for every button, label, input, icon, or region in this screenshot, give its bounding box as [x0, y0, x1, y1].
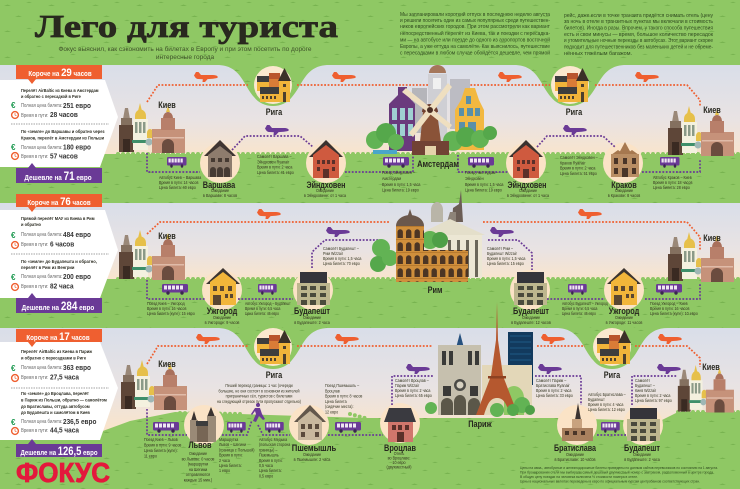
captions band 3: Маршрутка — [219, 437, 238, 442]
captions band 3: на Шегини — [189, 467, 208, 472]
captions band 3: (маршрутки — [188, 461, 209, 467]
icon: hiker at border — [251, 403, 265, 422]
captions band 1: Время в пути: 2 часа — [257, 164, 293, 170]
captions band 3: Ожидание — [189, 451, 207, 456]
intro text: column 1: Европы, а уже оттуда на самолёте. Как выяснилось, путешествие — [400, 44, 550, 50]
city labels: Киев — [702, 361, 720, 372]
overland option: Полная цена билета: — [21, 145, 62, 150]
banner: shorter by 76 hours: Короче на 76 часов — [27, 195, 91, 208]
captions band 2: Автобус Будапешт – Ужгород — [562, 300, 608, 306]
captions band 3: Вроцлав — [325, 388, 340, 393]
captions band 2: Ожидание — [213, 315, 231, 320]
captions band 1: Цена билета: 41 евро — [257, 169, 294, 175]
band 2 landscape: sky and ground — [0, 203, 740, 329]
captions band 3: (двухместный) — [387, 464, 412, 470]
captions band 3: Поезд Пшемышль – — [325, 383, 359, 388]
captions band 2: Самолёт Будапешт – — [323, 246, 359, 251]
direct flight option: Прямой перелёт МАУ из Киева в Рим — [21, 215, 95, 221]
overland option: Полная цена билета: — [21, 419, 62, 424]
captions band 3: 0,5 часа — [259, 463, 273, 468]
Rome landmark — [370, 190, 485, 282]
direct flight option: 251 евро — [63, 103, 92, 110]
captions band 1: Эйндховен — [465, 176, 484, 181]
captions band 3: Ожидание — [633, 452, 651, 457]
captions band 1 — [159, 154, 693, 198]
captions band 3: Пеший переход границы: 1 час (очереди — [225, 383, 293, 388]
captions band 2: Время в пути: 16 часов — [650, 306, 690, 311]
Riga landmarks — [257, 68, 631, 364]
city labels: Рига — [566, 106, 583, 117]
overland option: 180 евро — [63, 144, 92, 152]
captions band 1: в Варшаве: 8 часов — [203, 193, 238, 198]
overland option — [11, 128, 105, 161]
direct flight option: 363 евро — [63, 365, 92, 372]
captions band 2: Время в пути: 1,5 часа — [323, 256, 362, 261]
direct flight option: Время в пути: — [21, 113, 48, 118]
panel: band 3 comparison — [0, 329, 118, 458]
captions band 3: Время в пути: — [259, 457, 283, 463]
captions band 3: Автобус Медыка — [259, 437, 287, 442]
panel: band 2 comparison — [0, 194, 118, 313]
overland option: Полная цена билета: — [21, 274, 62, 279]
title: Лего для туриста — [35, 8, 338, 44]
captions band 2: Ожидание — [522, 315, 540, 320]
captions band 3: приграничных сёл, туристов с билетами — [226, 393, 293, 399]
captions band 2: Автобус Ужгород – Будапешт — [245, 300, 291, 306]
intro text: column 1: ми — на автобусе или поезде до одного из аэропортов восточной — [400, 36, 550, 44]
captions band 2 — [147, 246, 698, 325]
city labels: Эйндховен — [508, 179, 546, 190]
direct flight option: 27,5 часа — [50, 374, 79, 382]
overland option: Время в пути: — [21, 154, 48, 159]
captions band 1: Цена билета: 19 евро — [382, 187, 419, 193]
intro text: column 2: рейс, даже если в точке транзита придётся снимать отель (цену — [564, 12, 713, 19]
captions band 2: в Будапеште: 12 часов — [511, 320, 552, 325]
captions band 1: Автобус Краков – Киев — [653, 175, 692, 180]
captions band 3 — [144, 378, 672, 483]
captions band 1: Ожидание — [316, 188, 334, 193]
overland option: € — [11, 273, 16, 282]
captions band 1: Цена билета: 51 евро — [560, 170, 597, 176]
captions band 3: Будапешт — [588, 397, 605, 402]
intro text: column 1: Мы запланировали короткий отпуск в последнюю неделю августа — [400, 11, 550, 18]
city labels: Париж — [468, 418, 493, 429]
overland option — [11, 391, 107, 435]
city labels: Киев — [703, 232, 721, 243]
overland option: € — [11, 418, 16, 427]
direct flight option: Время в пути: — [21, 242, 48, 247]
captions band 1: Время в пути: 18 часов — [653, 180, 693, 185]
captions band 2: Цена билета: 46 евро — [245, 310, 280, 316]
footnote — [520, 465, 718, 484]
intro text: column 2 — [564, 12, 714, 57]
city labels: Киев — [158, 358, 176, 369]
direct flight option: € — [11, 231, 16, 240]
captions band 3: Ожидание — [303, 452, 321, 457]
intro text: column 1: и решили посетить один из самых популярных среди путешествен- — [400, 18, 550, 24]
captions band 1: Время в пути: 2 часа — [560, 165, 596, 171]
captions band 3: Время в пути: 8 часов — [325, 393, 363, 399]
captions band 3: во Вроцлаве: — [388, 455, 410, 461]
captions band 3: (граница с Польшей) — [219, 447, 255, 453]
intro text: column 2: за ночь в отеле в транзитных пунктах мы включали в стоимость — [564, 19, 713, 25]
captions band 3: Время в пути: — [219, 452, 243, 458]
subtitle: интересные города — [156, 54, 214, 61]
panel: band 1 comparison — [0, 65, 118, 183]
captions band 1: Поезд Эйндховен – — [382, 170, 415, 175]
captions band 3: Самолёт — [635, 378, 650, 383]
captions band 3: Братислава Ryanair — [536, 383, 570, 388]
captions band 3: Цена билета: 12 евро — [588, 407, 625, 412]
captions band 3: отправляются — [186, 472, 210, 477]
captions band 2: Цена билета: 46 евро — [562, 310, 597, 316]
overland option: до Братиславы, оттуда автобусом — [21, 403, 90, 409]
direct flight option: и обратно — [21, 221, 41, 227]
direct flight option: 28 часов — [50, 112, 78, 119]
captions band 2: в Ужгороде: 9 часов — [205, 320, 240, 325]
captions band 1: Ожидание — [211, 188, 229, 193]
captions band 1: Цена билета: 19 евро — [465, 187, 502, 193]
captions band 2: Поезд Ужгород – Киев — [650, 301, 688, 306]
captions band 3: Цена билета: — [219, 463, 242, 468]
captions band 3: Цена билета: 65 евро — [395, 393, 432, 398]
captions band 1: Эйндховен Ryanair — [257, 159, 290, 164]
captions band 1: Время в пути: 1,5 часа — [382, 182, 421, 187]
intro text: column 2: подходит для путешественников без маленьких детей и не обреме- — [564, 44, 713, 50]
captions band 3: (польская сторона — [259, 442, 291, 447]
captions band 3: Ожидание — [566, 452, 584, 457]
overland option: Краков, перелёт в Амстердам из Польши — [21, 135, 104, 141]
captions band 3: Время в пути: 9 часов — [144, 442, 182, 448]
captions band 1: Цена билета: 28 евро — [653, 185, 690, 190]
captions band 3: Отель — [394, 451, 404, 456]
intro text: column 1 — [400, 11, 551, 56]
direct flight option: 6 часов — [50, 241, 75, 249]
overland option: По «земле» до Варшавы и обратно через — [21, 128, 105, 134]
captions band 1: Время в пути: 14 часов — [159, 180, 199, 185]
captions band 1: Самолёт Варшава – — [257, 154, 291, 159]
city labels: Ужгород — [609, 305, 640, 316]
city labels: Будапешт — [294, 305, 330, 316]
captions band 3: Автобус Братислава – — [588, 392, 626, 397]
captions band 3: Цена билета: 33 евро — [536, 393, 573, 398]
band 3 landscape: sky and ground — [0, 328, 740, 489]
small town buildings, band 2 — [206, 268, 641, 305]
city labels: Львов — [189, 439, 211, 450]
footnote: При бронировании отеля мы выбирали самый дешёвый двухместный номер с завтраком, расположенный в центре города. — [520, 470, 714, 474]
captions band 3: на следующий отрезок пути пропускают отдельно) — [217, 398, 301, 404]
captions band 3: Время в пути: 2 часа — [635, 393, 671, 398]
city labels: Братислава — [554, 442, 596, 453]
overland option: 236,5 евро — [63, 419, 97, 426]
routes band 2 — [147, 222, 700, 299]
captions band 2: Время в пути: 16 часов — [147, 306, 187, 311]
intro text: column 2: билетов). Иногда в разы. Впрочем, у такого способа путешествия — [564, 26, 713, 32]
direct flight option: Полная цена билета: — [21, 365, 62, 370]
captions band 2: Время в пути: 6,5 часа — [562, 305, 598, 311]
overland option: 200 евро — [63, 274, 92, 281]
city labels — [158, 99, 721, 453]
captions band 1: Краков Ryanair — [560, 160, 586, 165]
captions band 2: Поезд Киев – Ужгород — [147, 301, 185, 306]
city labels: Рига — [604, 369, 621, 380]
routes band 3 — [147, 346, 700, 435]
Kiev landmarks — [119, 103, 734, 412]
banner: shorter by 29 hours: Короче на 29 часов — [28, 66, 92, 79]
city labels: Амстердам — [417, 158, 459, 169]
captions band 1: Ожидание — [519, 188, 537, 193]
overland option: в Париж из Польши, обратно — самолётом — [21, 396, 107, 403]
direct flight option: Перелёт AirBaltic из Киева в Амстердам — [21, 88, 99, 93]
captions band 3: 12 евро — [325, 409, 339, 415]
city labels: Рим — [428, 284, 442, 295]
captions band 1: Цена билета: 40 евро — [159, 185, 196, 190]
footnote: В общую цену поездки на человека включена ½ стоимости номера в отеле. — [520, 474, 638, 479]
captions band 3: Цена билета: — [259, 468, 282, 473]
intro text: column 1: непосредственный перелёт из Киева, так и поездки с пересадка- — [400, 30, 550, 37]
captions band 3: (сидячие места): — [325, 404, 353, 409]
overland option: 57 часов — [50, 153, 78, 161]
overland option — [11, 258, 97, 291]
captions band 3: Будапешт – — [635, 383, 655, 388]
city labels: Краков — [611, 179, 637, 190]
captions band 3: в Будапеште: 2 часа — [624, 457, 660, 462]
captions band 2: Будапешт Wizzair — [487, 251, 517, 256]
captions band 3: в Братиславе: 10 часов — [555, 457, 596, 462]
captions band 1: в Эйндховене: от 1 часа — [507, 193, 550, 198]
overland option: перелёт в Рим из Венгрии — [21, 265, 75, 270]
city labels: Киев — [158, 99, 176, 110]
banner: cheaper by 71 euro: Дешевле на 71 евро — [24, 170, 92, 183]
small town buildings, band 3 — [190, 403, 660, 442]
direct flight option: Перелёт AirBaltic из Киева в Париж — [21, 349, 93, 354]
captions band 3: Поезд Киев – Львов — [144, 437, 178, 442]
direct flight option: 484 евро — [63, 232, 92, 239]
intro text: column 2: и утомительные ночные переезды в автобусах. Этот вариант скорее — [564, 38, 713, 44]
captions band 1: в Эйндховене: от 1 часа — [304, 193, 347, 198]
captions band 3: Львов – Шегини — [219, 442, 247, 447]
captions band 3: Время в пути: 2 часа — [395, 388, 431, 393]
captions band 2: Время в пути: 6,5 часа — [245, 305, 281, 311]
captions band 3: 2 часа — [219, 457, 230, 463]
routes band 1 — [147, 85, 700, 172]
captions band 3: каждые 15 мин.) — [184, 477, 213, 483]
icon: purple planes — [265, 125, 681, 374]
city labels: Эйндховен — [307, 179, 345, 190]
Paris landmark — [425, 302, 535, 417]
city labels: Вроцлав — [384, 442, 416, 453]
captions band 1: Ожидание — [615, 188, 633, 193]
city labels: Киев — [703, 104, 721, 115]
city labels: Пшемышль — [292, 442, 336, 453]
overland option: 44,5 часа — [50, 427, 79, 435]
city labels: Рига — [266, 369, 283, 380]
overland option: Время в пути: — [21, 284, 48, 289]
captions band 2: Цена билета (купе): 10 евро — [650, 311, 698, 316]
captions band 2: Время в пути: 1,5 часа — [487, 256, 526, 261]
direct flight option: и обратно с пересадками в Риге — [21, 354, 87, 361]
captions band 3: Самолёт Вроцлав – — [395, 378, 429, 383]
intro text: column 2: нённых тяжёлым багажом. — [564, 51, 632, 57]
direct flight option — [11, 215, 95, 249]
captions band 1: Самолёт Эйндховен – — [560, 155, 598, 160]
captions band 3: Цена билета: 97 евро — [635, 398, 672, 403]
direct flight option: € — [11, 364, 16, 373]
captions band 1: Время в пути: 1,5 часа — [465, 182, 504, 187]
captions band 3: Париж Wizzair — [395, 383, 420, 388]
captions band 1: Поезд Амстердам – — [465, 170, 498, 175]
direct flight option: Полная цена билета: — [21, 103, 62, 108]
captions band 2: Цена билета (купе): 15 евро — [147, 311, 195, 316]
captions band 3: в Пшемышле: 2 часа — [294, 457, 331, 462]
intro text: column 1: ников европейских городов. При этом рассмотрели как вариант — [400, 23, 551, 30]
city labels: Будапешт — [513, 305, 549, 316]
icon: buses — [153, 157, 682, 433]
city labels: Киев — [158, 230, 176, 241]
direct flight option: Время в пути: — [21, 375, 48, 380]
intro text: column 1: с пересадками в любом случае обойдётся дешевле, чем прямой — [400, 50, 550, 56]
captions band 3: 1 евро — [219, 468, 231, 473]
captions band 1: Автобус Киев – Варшава — [159, 175, 201, 180]
overland option: 82 часа — [50, 283, 74, 291]
captions band 1: в Кракове: 8 часов — [608, 193, 641, 198]
captions band 1: Амстердам — [382, 176, 401, 181]
captions band 2: Ожидание — [615, 315, 633, 320]
overland option: Время в пути: — [21, 428, 48, 433]
captions band 3: во Львове: 0 часов — [182, 456, 215, 461]
captions band 2: Ожидание — [303, 315, 321, 320]
city labels: Ужгород — [207, 305, 238, 316]
captions band 3: большие, но они состоят в основном из жителей — [219, 388, 300, 393]
overland option: € — [11, 143, 16, 152]
direct flight option: и обратно с пересадкой в Риге — [21, 92, 81, 99]
captions band 3: Цена билета (купе): — [144, 448, 178, 453]
captions band 3: Самолёт Париж – — [536, 378, 566, 383]
direct flight option — [11, 349, 93, 382]
overland option: до Будапешта и самолётом в Киев — [21, 410, 90, 415]
footnote: Цены в национальных валютах переведены в евро по официальным курсам центробанков соответствующих стран. — [520, 478, 700, 484]
icon: orange planes — [194, 72, 682, 344]
captions band 2: Рим Wizzair — [323, 251, 344, 256]
captions band 3: 0,5 евро — [259, 473, 274, 479]
captions band 3: Киев Wizzair — [635, 388, 657, 393]
city labels: Рига — [266, 106, 283, 117]
logo: Focus: ФОКУС — [16, 457, 110, 488]
small town buildings, band 1 — [204, 140, 639, 178]
direct flight option: Полная цена билета: — [21, 232, 62, 237]
overland option: По «земле» до Будапешта и обратно, — [21, 258, 97, 264]
captions band 2: в Будапеште: 2 часа — [294, 320, 330, 325]
captions band 3: Цена билета — [325, 398, 347, 404]
captions band 3: границы) – — [259, 447, 278, 453]
captions band 3: Время в пути: 2 часа — [536, 388, 572, 393]
intro text: column 2: есть и свои минусы — время, большое количество пересадок — [564, 32, 714, 38]
overland option: По «земле» до Вроцлава, перелёт — [21, 391, 90, 396]
captions band 2: Цена билета: 70 евро — [323, 261, 360, 266]
captions band 3: 11 евро — [144, 453, 157, 459]
banner: shorter by 17 hours: Короче на 17 часов — [26, 330, 90, 343]
city labels: Варшава — [203, 179, 236, 190]
direct flight option — [11, 88, 99, 119]
banner: cheaper by 126.5 euro: Дешевле на 126,5 евро — [20, 445, 98, 458]
band 1 landscape: sky and ground — [0, 65, 740, 203]
captions band 2: Самолёт Рим – — [487, 246, 513, 251]
captions band 3: 10 евро — [392, 460, 406, 465]
city labels: Будапешт — [624, 442, 660, 453]
captions band 2: Цена билета: 15 евро — [487, 261, 524, 266]
captions band 3: Время в пути: 4 часа — [588, 402, 624, 407]
banner: cheaper by 284 euro: Дешевле на 284 евро — [22, 300, 94, 313]
Amsterdam landmark — [366, 65, 497, 155]
direct flight option: € — [11, 101, 16, 110]
subtitle: Фокус выяснил, как сэкономить на билетах в Европу и при этом посетить по дороге — [58, 45, 312, 53]
captions band 2: в Ужгороде: 11 часов — [606, 320, 643, 325]
captions band 3: Пшемышль — [259, 452, 279, 458]
